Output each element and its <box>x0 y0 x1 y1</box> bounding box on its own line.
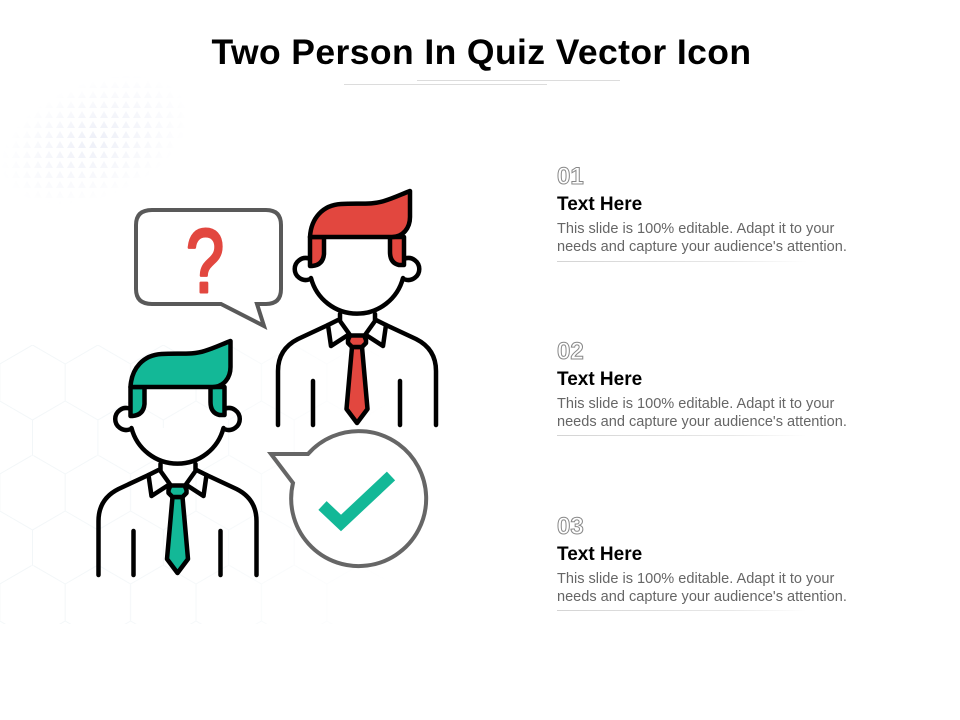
item 02 <box>557 338 847 436</box>
check mark <box>322 476 391 523</box>
number 03: 03 <box>557 513 584 540</box>
body text 02 <box>557 396 847 430</box>
speech bubble: question <box>136 210 281 326</box>
body text 03: needs and capture your audience's attention. <box>557 589 847 605</box>
body text 01 <box>557 220 847 255</box>
title: Two Person In Quiz Vector Icon <box>212 32 751 72</box>
green hair <box>130 341 230 416</box>
heading 02: Text Here <box>557 368 642 390</box>
red tie <box>346 336 368 423</box>
background: hexagon and dot texture <box>0 104 236 624</box>
divider 01 <box>557 261 807 262</box>
person: red hair <box>278 191 436 425</box>
number 01: 01 <box>557 163 584 190</box>
heading 01: Text Here <box>557 194 642 214</box>
title underline <box>344 80 620 85</box>
item 03 <box>557 513 847 611</box>
body text 03 <box>557 570 847 605</box>
red hair <box>310 191 410 266</box>
body text 03: This slide is 100% editable. Adapt it to your <box>557 570 834 586</box>
divider 03 <box>557 610 807 611</box>
body text 01: needs and capture your audience's attention. <box>557 239 847 255</box>
heading 03: Text Here <box>557 544 642 564</box>
divider 02 <box>557 435 807 436</box>
body text 02: This slide is 100% editable. Adapt it to your <box>557 396 834 412</box>
question mark: ? <box>186 211 224 311</box>
body text 02: needs and capture your audience's attention. <box>557 414 847 430</box>
body text 01: This slide is 100% editable. Adapt it to your <box>557 220 834 236</box>
number 02: 02 <box>557 338 584 365</box>
item 01 <box>557 163 847 262</box>
speech bubble: correct answer <box>271 431 426 566</box>
person: green hair <box>98 341 256 575</box>
green tie <box>167 486 188 573</box>
